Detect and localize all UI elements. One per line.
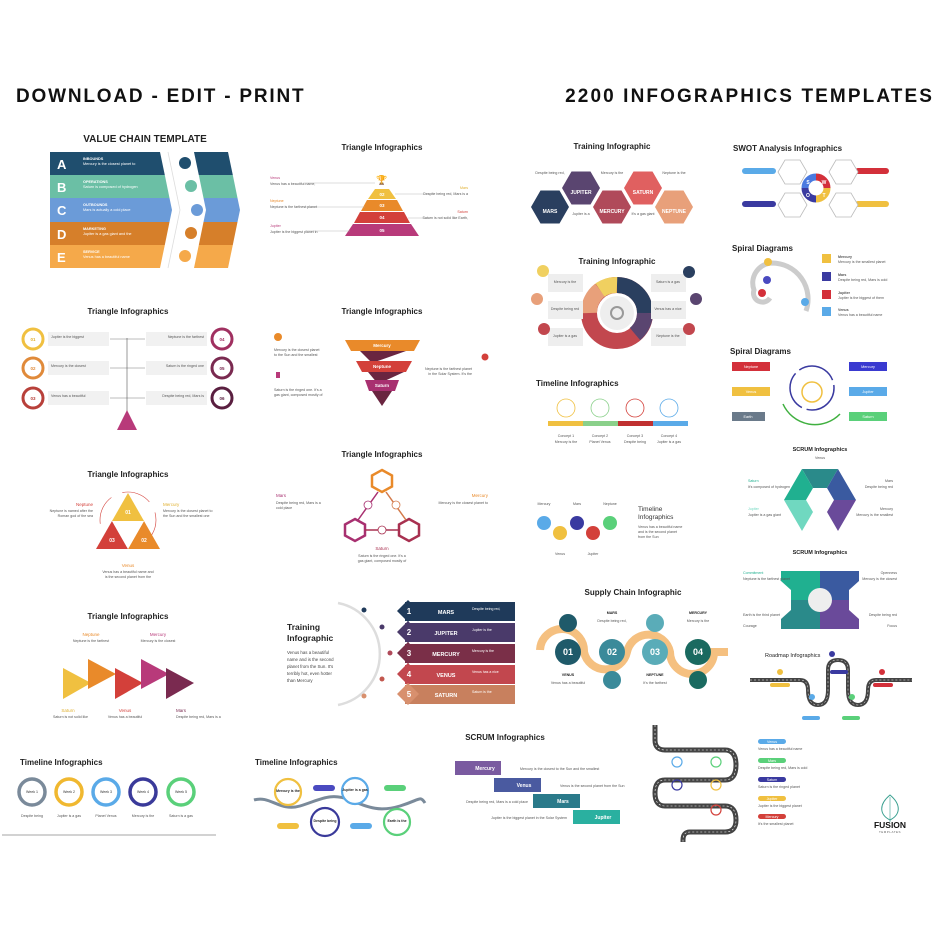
panel: triangle hexagons (276, 450, 489, 563)
panel: scrum x: Earth is the third planet (743, 613, 780, 617)
panel: timeline circles: Saturn is a gas (169, 814, 193, 818)
panel: triangle pyramid: 03 (379, 203, 385, 208)
panel: spiral 1: Venus (838, 308, 849, 312)
panel: triangle arrows: Venus (119, 708, 132, 713)
panel: scrum hexagon: Mercury is the smallest (856, 513, 893, 517)
panel: timeline wave: Earth is the (387, 819, 407, 823)
panel: triangle hexagons: gas giant, composed mostly of (358, 559, 406, 563)
panel: triangle arrows: Triangle Infographics (88, 612, 169, 621)
panel: training donut (531, 257, 702, 346)
panel: timeline bar: Concept 4 (661, 434, 677, 438)
panel: roadmap: Roadmap Infographics (765, 653, 821, 659)
panel: training numbered: terribly hot, even hotter (287, 671, 332, 676)
logo: fusion: FUSION (874, 820, 906, 830)
panel: scrum x (743, 550, 897, 629)
panel: training numbered: than Mercury (287, 678, 313, 683)
panel: triangle pyramid (270, 143, 468, 236)
panel: supply chain: MARS (607, 611, 618, 615)
panel: spiral 2: Jupiter (862, 390, 874, 394)
panel: triangle circle: Venus has a beautiful name and (102, 570, 154, 574)
panel: timeline bar: Planet Venus (589, 440, 611, 444)
panel: training numbered: Training (287, 622, 320, 632)
panel: road legend: Mars (768, 759, 776, 763)
panel: scrum x: Commitment (743, 571, 763, 575)
panel: training numbered: Jupiter is the (472, 628, 492, 632)
panel: training numbered: Infographic (287, 633, 334, 643)
panel: timeline circles: Mercury is the (132, 814, 154, 818)
panel: scrum bars: Jupiter (595, 815, 611, 821)
panel: value chain: Mercury is the closest planet to (83, 162, 135, 166)
panel: training hexagons: JUPITER (570, 190, 592, 196)
panel: road legend: It's the smallest planet (758, 822, 793, 826)
panel: triangle hexagons: cold place (276, 506, 292, 510)
panel: supply chain: It's the farthest (643, 681, 667, 685)
panel: triangle zigzag: Triangle Infographics (342, 307, 423, 316)
panel: timeline circles: Week 3 (100, 790, 112, 794)
panel: training numbered: 1 (407, 607, 412, 616)
panel: timeline circles (2, 758, 216, 835)
panel: timeline wave: Mercury is the (276, 789, 300, 793)
panel: roadmap (750, 651, 912, 720)
panel: scrum hexagon: Mercury (880, 507, 893, 511)
panel: triangle hexagons: Mercury (472, 493, 489, 498)
panel: triangle circle: Mercury (163, 502, 180, 507)
panel: scrum hexagon: Mars (885, 479, 893, 483)
panel: value chain (50, 134, 240, 268)
panel: triangle circle: 03 (109, 538, 115, 544)
panel: triangle list: 03 (30, 396, 36, 401)
panel: triangle pyramid: Neptune is the farthest planet (270, 205, 317, 209)
panel: spiral 2: Earth (743, 415, 753, 419)
panel: triangle list: 05 (219, 366, 225, 371)
panel: scrum hexagon: Venus (815, 456, 825, 460)
panel: triangle circle: Neptune (76, 502, 93, 507)
panel: timeline wave: Despite being (314, 819, 336, 823)
panel: triangle hexagons: Mars (276, 493, 287, 498)
panel: triangle list: Triangle Infographics (88, 307, 169, 316)
panel: timeline hex: from the Sun (638, 535, 659, 539)
panel: timeline bar: Timeline Infographics (536, 379, 619, 388)
panel: triangle hexagons: Despite being red, Mars is a (276, 501, 321, 505)
panel: supply chain: Despite being red, (597, 619, 627, 623)
panel: scrum x: Mercury is the closest (862, 577, 897, 581)
panel: timeline bar: Concept 2 (592, 434, 608, 438)
panel: value chain: Saturn is composed of hydrogen (83, 185, 138, 189)
panel: triangle circle: Triangle Infographics (88, 470, 169, 479)
panel: triangle zigzag: to the Sun and the smallest (274, 353, 318, 357)
panel: triangle arrows: Despite being red, Mars is a (176, 715, 221, 719)
panel: triangle arrows: Neptune is the farthest (73, 639, 109, 643)
panel: timeline circles: Planet Venus (95, 814, 117, 818)
panel: supply chain: Venus has a beautiful (551, 681, 585, 685)
panel: timeline circles: Week 2 (63, 790, 75, 794)
panel: timeline circles: Jupiter is a gas (57, 814, 81, 818)
panel: timeline wave: Jupiter is a gas (342, 788, 368, 792)
panel: timeline circles: Week 1 (26, 790, 38, 794)
panel: spiral 1: Despite being red, Mars is cold (838, 278, 887, 282)
panel: spiral 2: Saturn (862, 415, 874, 419)
panel: triangle zigzag: Mercury (373, 343, 391, 348)
panel: supply chain: NEPTUNE (646, 673, 664, 677)
panel: training numbered: planet from the Sun. It's (287, 664, 334, 669)
panel: triangle zigzag: Neptune is the farthest planet (425, 367, 472, 371)
panel: supply chain: VENUS (562, 673, 575, 677)
panel: timeline bar: Mercury is the (555, 440, 577, 444)
panel: triangle pyramid: Saturn is not solid like Earth, (422, 216, 468, 220)
header right: 2200 INFOGRAPHICS TEMPLATES (565, 86, 934, 107)
panel: training hexagons: MARS (543, 209, 558, 215)
panel: timeline hex: Venus (555, 552, 565, 556)
panel: triangle circle: Neptune is named after the (50, 509, 93, 513)
panel: triangle pyramid: Jupiter (270, 224, 282, 228)
panel: value chain: MARKETING (83, 227, 106, 231)
panel: triangle arrows: Saturn (61, 708, 75, 713)
panel: triangle hexagons: Saturn is the ringed one. It's a (358, 554, 406, 558)
panel: scrum bars: SCRUM Infographics (465, 733, 545, 742)
panel: triangle arrows: Mars (176, 708, 187, 713)
panel: training hexagons: SATURN (633, 190, 654, 196)
panel: scrum hexagon: It's composed of hydrogen (748, 485, 790, 489)
panel: supply chain: Mercury is the (687, 619, 709, 623)
panel: scrum x: Neptune is the farthest planet (743, 577, 790, 581)
panel: training numbered: JUPITER (434, 631, 458, 637)
panel: triangle hexagons: Mercury is the closest planet to (438, 501, 488, 505)
panel: triangle pyramid: Triangle Infographics (342, 143, 423, 152)
panel: value chain: A (57, 157, 67, 172)
panel: value chain: SERVICE (83, 250, 100, 254)
panel: timeline circles: Despite being (21, 814, 43, 818)
panel: supply chain: 04 (693, 647, 703, 657)
panel: triangle hexagons: Saturn (375, 546, 389, 551)
panel: swot: SWOT Analysis Infographics (733, 144, 843, 153)
panel: road legend: Despite being red, Mars is cold (758, 766, 807, 770)
panel: triangle list (23, 307, 232, 430)
panel: road path (655, 725, 736, 842)
panel: timeline hex: Neptune (603, 502, 617, 506)
panel: triangle zigzag: Neptune (373, 364, 391, 369)
panel: value chain: Jupiter is a gas giant and the (83, 232, 132, 236)
panel: timeline hex: Mars (573, 502, 581, 506)
panel: value chain: VALUE CHAIN TEMPLATE (83, 134, 207, 145)
panel: triangle pyramid: 04 (379, 215, 385, 220)
panel: training donut: Despite being red (551, 307, 579, 311)
panel: scrum x: Despite being red (869, 613, 897, 617)
panel: training hexagons: Despite being red, (535, 171, 565, 175)
panel: timeline bar (536, 379, 688, 444)
header left: DOWNLOAD - EDIT - PRINT (16, 86, 305, 107)
panel: triangle pyramid: Neptune (270, 199, 284, 203)
panel: training hexagons: Jupiter is a (572, 212, 590, 216)
panel: swot: T (822, 193, 826, 199)
panel: scrum bars: Jupiter is the biggest planet in the Solar System (491, 816, 567, 820)
panel: road legend: Venus has a beautiful name (758, 747, 802, 751)
panel: timeline hex: Mercury (538, 502, 551, 506)
panel: triangle arrows: Mercury (150, 632, 167, 637)
panel: timeline bar: Concept 1 (558, 434, 574, 438)
panel: timeline wave (254, 758, 425, 836)
panel: spiral 1: Mars (838, 273, 846, 277)
panel: training hexagons: Mercury is the (601, 171, 623, 175)
panel: spiral 2: Spiral Diagrams (730, 347, 791, 356)
panel: swot (733, 144, 889, 217)
panel: timeline bar: Jupiter is a gas (657, 440, 681, 444)
panel: triangle zigzag: Saturn (375, 383, 389, 388)
panel: timeline circles: Timeline Infographics (20, 758, 103, 767)
panel: triangle circle (50, 470, 213, 579)
panel: value chain: E (57, 250, 66, 265)
panel: timeline hex: Venus has a beautiful name (638, 525, 682, 529)
panel: road legend (758, 739, 807, 826)
panel: training numbered: 5 (407, 690, 412, 699)
panel: scrum bars: Venus (517, 783, 532, 789)
panel: training donut: Mercury is the (554, 280, 576, 284)
panel: training donut: Saturn is a gas (656, 280, 680, 284)
panel: triangle list: Neptune is the farthest (168, 335, 204, 339)
logo: fusion: TEMPLATES (879, 830, 901, 834)
panel: triangle list: Despite being red, Mars is (162, 394, 204, 398)
panel: scrum bars: Mercury is the closest to the Sun and the smallest (520, 767, 599, 771)
panel: road legend: Jupiter is the biggest planet (758, 804, 802, 808)
panel: triangle list: 01 (30, 337, 36, 342)
panel: triangle list: Jupiter is the biggest (51, 335, 84, 339)
panel: training numbered (287, 600, 515, 705)
panel: scrum bars: Despite being red, Mars is a cold place (466, 800, 528, 804)
panel: supply chain: 01 (563, 647, 573, 657)
panel: triangle list: Saturn is the ringed one (166, 364, 204, 368)
panel: timeline bar: Despite being (624, 440, 646, 444)
panel: training donut: Neptune is the (656, 334, 680, 338)
panel: value chain: B (57, 180, 66, 195)
panel: training numbered: Venus has a nice (472, 670, 499, 674)
panel: road legend: Saturn is the ringed planet (758, 785, 800, 789)
panel: timeline wave: Timeline Infographics (255, 758, 338, 767)
panel: triangle pyramid: Saturn (457, 210, 468, 214)
panel: supply chain (540, 588, 728, 689)
panel: training numbered: Venus has a beautiful (287, 650, 329, 655)
panel: training numbered: 2 (407, 628, 412, 637)
panel: scrum hexagon: Jupiter (748, 507, 760, 511)
panel: triangle pyramid: 🏆 (376, 174, 388, 185)
panel: training hexagons: It's a gas giant (631, 212, 655, 216)
panel: triangle circle: Mercury is the closest planet to (163, 509, 213, 513)
logo: fusion (874, 795, 906, 834)
panel: training numbered: 3 (407, 649, 412, 658)
panel: triangle arrows: Neptune (82, 632, 100, 637)
panel: spiral 1 (732, 244, 887, 317)
panel: training numbered: name and is the second (287, 657, 334, 662)
panel: triangle pyramid: Despite being red, Mars is a (423, 192, 468, 196)
panel: spiral 1: Spiral Diagrams (732, 244, 793, 253)
panel: triangle zigzag: Mercury is the closest planet (274, 348, 320, 352)
panel: timeline circles: Week 5 (175, 790, 187, 794)
panel: value chain: OUTBOUNDS (83, 203, 108, 207)
panel: training hexagons (531, 142, 693, 224)
panel: training donut: Jupiter is a gas (553, 334, 577, 338)
panel: timeline hex: Infographics (638, 514, 674, 521)
panel: training numbered: MERCURY (432, 652, 460, 658)
panel: supply chain: 02 (607, 647, 617, 657)
panel: triangle pyramid: 05 (379, 228, 385, 233)
panel: spiral 1: Venus has a beautiful name (838, 313, 882, 317)
panel: training numbered: SATURN (435, 693, 457, 699)
panel: triangle pyramid: Jupiter is the biggest planet in (270, 230, 318, 234)
panel: triangle zigzag: gas giant, composed mostly of (274, 393, 323, 397)
panel: training hexagons: NEPTUNE (662, 209, 687, 215)
panel: scrum hexagon: Saturn (748, 479, 759, 483)
panel: scrum x: Focus (887, 624, 897, 628)
panel: value chain: Mars is actually a cold place (83, 208, 130, 212)
panel: training numbered: Saturn is the (472, 690, 492, 694)
panel: value chain: C (57, 203, 67, 218)
panel: spiral 1: Jupiter is the biggest of them (838, 296, 884, 300)
panel: triangle pyramid: Venus has a beautiful name, (270, 182, 315, 186)
panel: road legend: Venus (767, 740, 777, 744)
panel: triangle zigzag: Saturn is the ringed one. It's a (274, 388, 322, 392)
panel: scrum x: SCRUM Infographics (793, 550, 847, 556)
panel: scrum x: Openness (881, 571, 897, 575)
panel: triangle circle: the Sun and the smallest one (163, 514, 210, 518)
panel: supply chain: Supply Chain Infographic (585, 588, 682, 597)
panel: value chain: D (57, 227, 66, 242)
panel: value chain: Venus has a beautiful name (83, 255, 130, 259)
panel: scrum hexagon (748, 447, 893, 531)
panel: training donut: Training Infographic (579, 257, 656, 266)
panel: spiral 1: Mercury (838, 255, 852, 259)
panel: triangle circle: Roman god of the sea (58, 514, 93, 518)
panel: triangle list: Mercury is the closest (51, 364, 86, 368)
panel: timeline bar: Concept 3 (627, 434, 643, 438)
panel: timeline hex (537, 502, 682, 556)
panel: road legend: Saturn (767, 778, 777, 782)
panel: triangle list: 02 (30, 366, 36, 371)
panel: triangle arrows (53, 612, 221, 719)
panel: training numbered: Despite being red, (472, 607, 500, 611)
panel: triangle circle: Venus (122, 563, 135, 568)
panel: triangle list: 06 (219, 396, 225, 401)
panel: timeline hex: and is the second planet (638, 530, 677, 534)
panel: training numbered: 4 (407, 670, 412, 679)
panel: timeline hex: Jupiter (588, 552, 599, 556)
panel: triangle arrows: Saturn is not solid like (53, 715, 88, 719)
panel: training hexagons: Neptune is the (662, 171, 686, 175)
panel: triangle pyramid: 02 (379, 192, 385, 197)
panel: triangle zigzag: in the Solar System. It's the (428, 372, 472, 376)
panel: timeline hex: Timeline (638, 506, 663, 513)
panel: scrum bars: Mars (557, 799, 569, 805)
panel: triangle list: 04 (219, 337, 225, 342)
panel: training numbered: VENUS (437, 673, 456, 679)
panel: spiral 1: Mercury is the smallest planet (838, 260, 886, 264)
panel: triangle arrows: Venus has a beautiful (108, 715, 142, 719)
panel: value chain: OPERATIONS (83, 180, 108, 184)
panel: scrum hexagon: Jupiter is a gas giant (748, 513, 781, 517)
panel: scrum bars (455, 733, 625, 824)
panel: swot: O (806, 193, 810, 199)
panel: timeline circles: Week 4 (137, 790, 149, 794)
panel: value chain: INBOUNDS (83, 157, 104, 161)
panel: spiral 2: Mercury (861, 365, 875, 369)
panel: triangle circle: 02 (141, 538, 147, 544)
panel: road legend: Jupiter (767, 797, 778, 801)
panel: scrum hexagon: SCRUM Infographics (793, 447, 847, 453)
panel: road legend: Mercury (766, 815, 779, 819)
panel: triangle zigzag (274, 307, 488, 406)
panel: training numbered: MARS (438, 610, 454, 616)
panel: training donut: Venus has a nice (654, 307, 682, 311)
panel: triangle circle: 01 (125, 510, 131, 516)
panel: scrum hexagon: Despite being red (865, 485, 893, 489)
panel: triangle arrows: Mercury is the closest (141, 639, 175, 643)
panel: spiral 2: Venus (746, 390, 756, 394)
panel: swot: S (806, 180, 810, 186)
panel: supply chain: MERCURY (689, 611, 708, 615)
panel: triangle pyramid: Mars (460, 186, 468, 190)
panel: spiral 1: Jupiter (838, 291, 851, 295)
panel: triangle pyramid: Venus (270, 176, 280, 180)
panel: training hexagons: Training Infographic (574, 142, 651, 151)
panel: spiral 2: Neptune (744, 365, 758, 369)
panel: spiral 2 (730, 347, 887, 425)
panel: scrum x: Courage (743, 624, 757, 628)
panel: swot: W (822, 180, 827, 186)
panel: scrum bars: Mercury (475, 766, 495, 772)
panel: scrum bars: Venus is the second planet from the Sun (560, 784, 625, 788)
panel: triangle hexagons: Triangle Infographics (342, 450, 423, 459)
panel: training numbered: Mercury is the (472, 649, 494, 653)
panel: triangle circle: is the second planet from the (105, 575, 151, 579)
panel: triangle list: Venus has a beautiful (51, 394, 86, 398)
panel: supply chain: 03 (650, 647, 660, 657)
panel: training hexagons: MERCURY (599, 209, 625, 215)
